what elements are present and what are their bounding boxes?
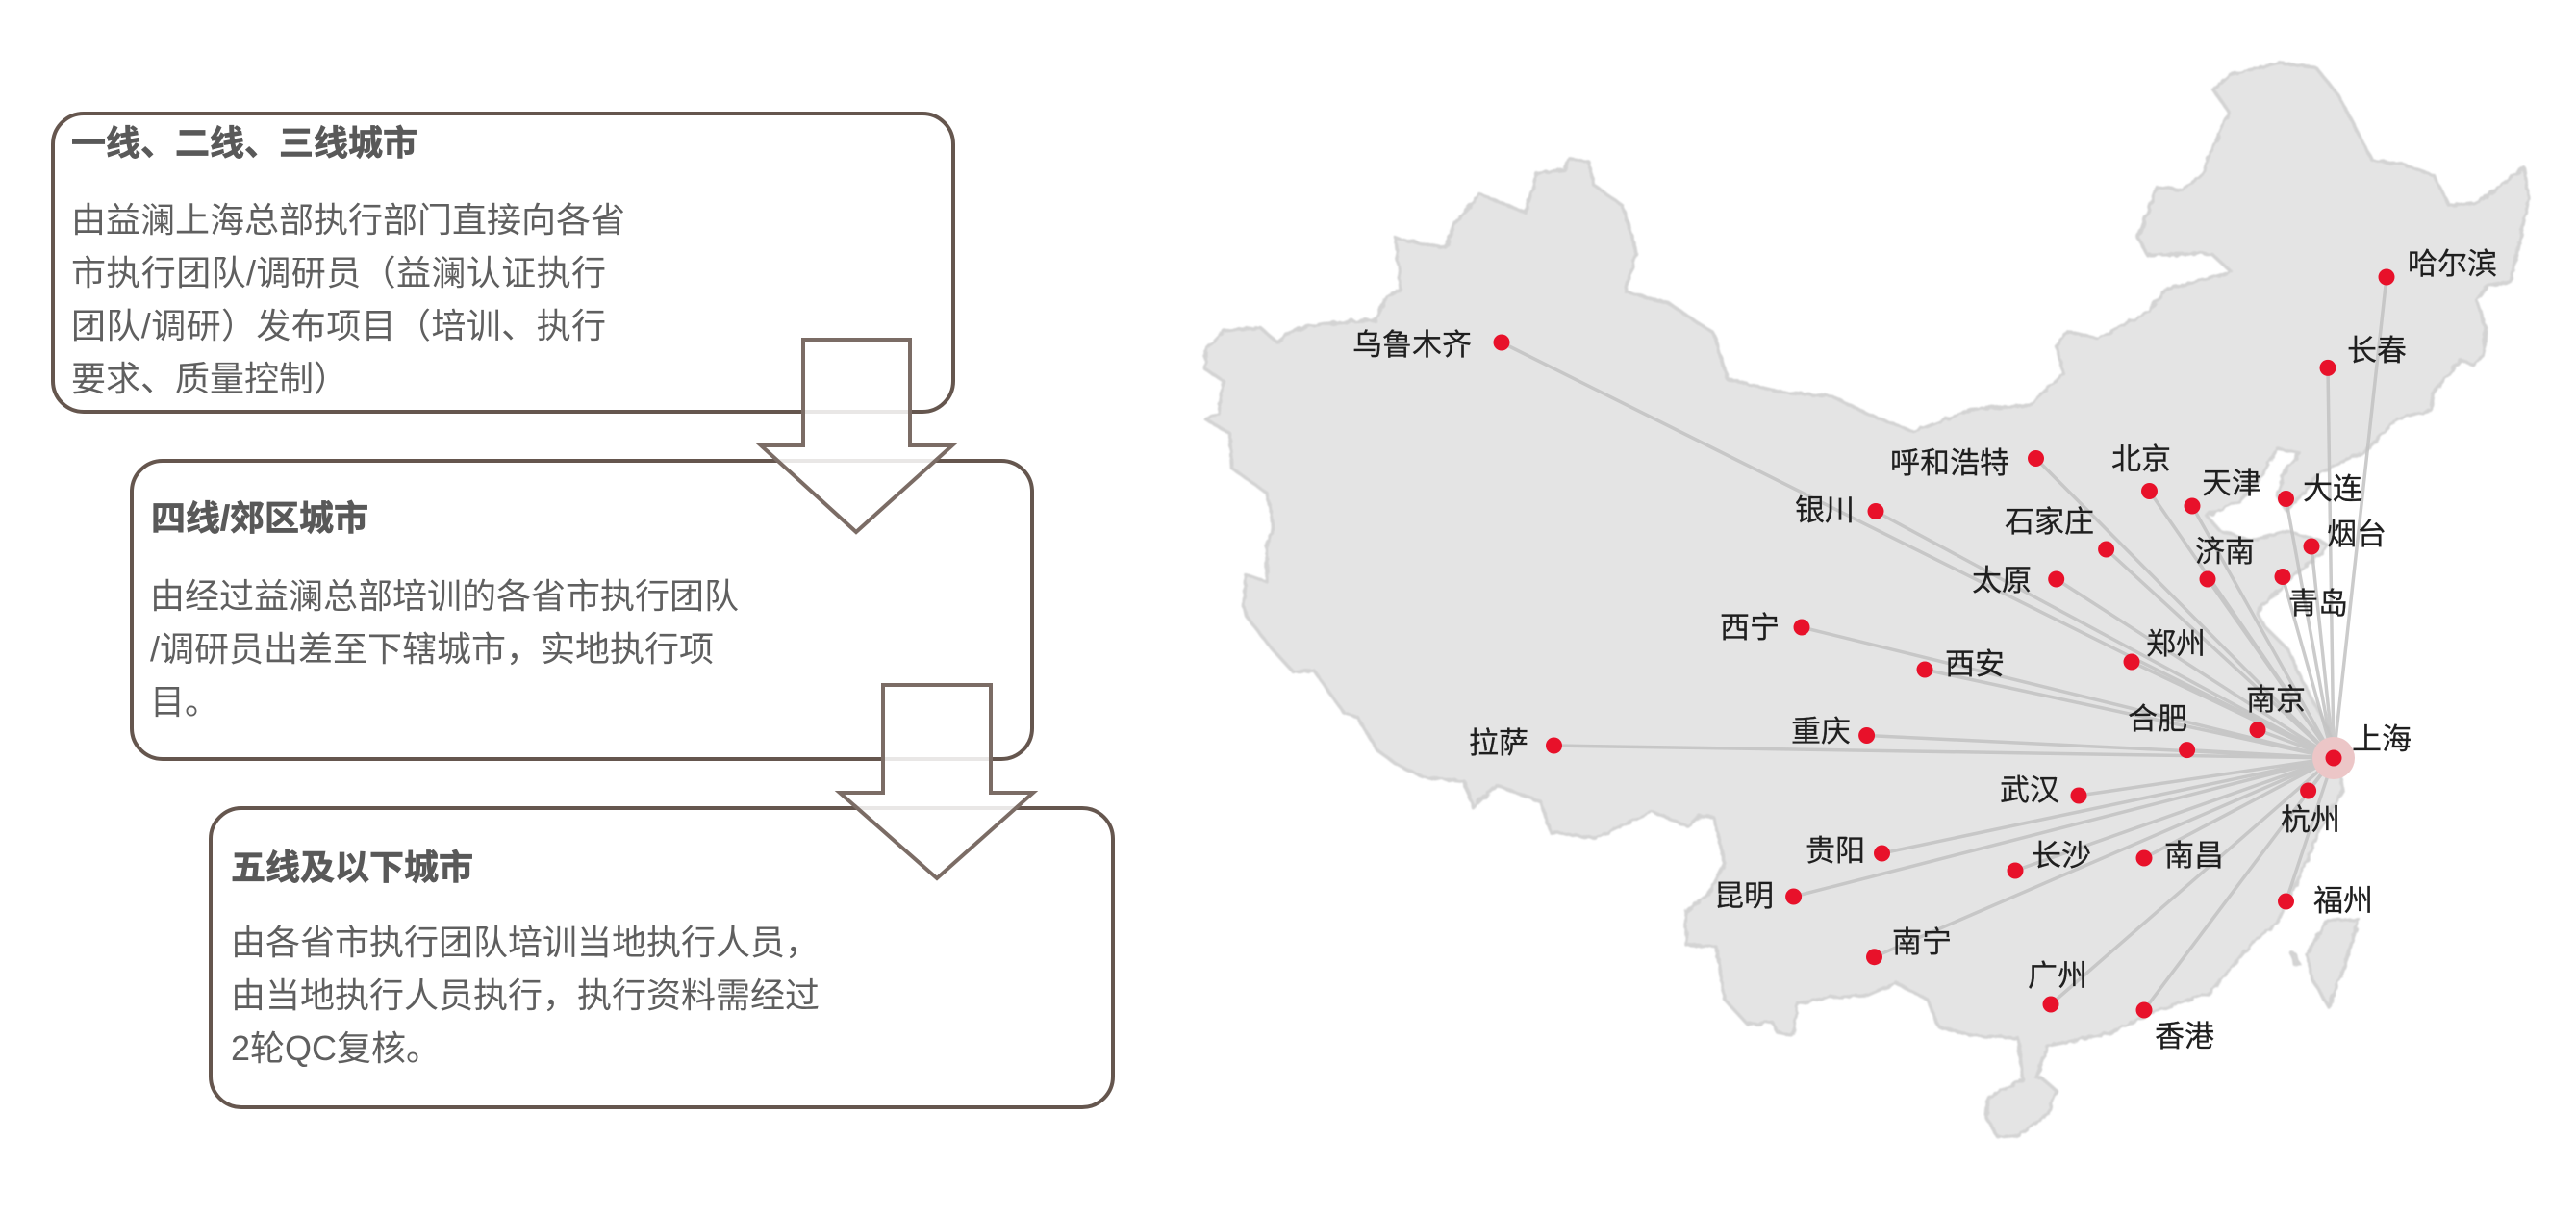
text block: tier 1-3 cities: 要求、质量控制） xyxy=(71,359,348,398)
city labels: 郑州 xyxy=(2146,620,2206,663)
city labels: 长沙 xyxy=(2032,831,2091,874)
text block: tier 1-3 cities: 市执行团队/调研员（益澜认证执行 xyxy=(71,253,606,292)
city labels: 香港 xyxy=(2155,1012,2214,1055)
text block: tier 1-3 cities: 由益澜上海总部执行部门直接向各省 xyxy=(71,200,625,240)
text block: tier 5 and below cities: 由各省市执行团队培训当地执行人员， xyxy=(231,923,820,962)
city labels: 长春 xyxy=(2347,326,2407,369)
city labels: 西宁 xyxy=(1720,603,1780,646)
city labels: 广州 xyxy=(2028,951,2087,995)
city labels: 乌鲁木齐 xyxy=(1352,320,1472,364)
city labels: 大连 xyxy=(2303,465,2362,508)
text block: tier 4 and suburban cities: 目。 xyxy=(150,682,219,722)
city labels: 贵阳 xyxy=(1806,826,1865,870)
city labels: 烟台 xyxy=(2327,510,2387,553)
city labels: 杭州 xyxy=(2281,796,2340,839)
text block: tier 5 and below cities: 由当地执行人员执行，执行资料需经过 xyxy=(231,975,820,1015)
text block: tier 4 and suburban cities: /调研员出差至下辖城市，实地执行项 xyxy=(150,629,714,669)
city labels: 银川 xyxy=(1795,486,1855,529)
text block: tier 5 and below cities: 2轮QC复核。 xyxy=(231,1028,441,1068)
text block: tier 4 and suburban cities: 由经过益澜总部培训的各省市执行团队 xyxy=(150,576,739,616)
arrow: tier 4 to tier 5 xyxy=(840,685,1033,878)
text block: tier 1-3 cities xyxy=(71,200,625,398)
text block: tier 5 and below cities xyxy=(231,923,820,1068)
city labels: 南宁 xyxy=(1892,918,1952,961)
city dots xyxy=(1493,269,2395,1018)
city labels: 青岛 xyxy=(2288,579,2348,622)
city labels: 武汉 xyxy=(2000,766,2059,809)
city labels: 福州 xyxy=(2313,876,2373,920)
panel: tier 1-3 cities xyxy=(53,114,953,412)
city labels xyxy=(1352,240,2497,1055)
heading: tier 4 and suburban cities: 四线/郊区城市 xyxy=(151,498,368,538)
city labels: 西安 xyxy=(1945,640,2005,683)
city labels: 南昌 xyxy=(2164,831,2224,874)
map land xyxy=(1205,63,2529,1137)
text block: tier 1-3 cities: 团队/调研）发布项目（培训、执行 xyxy=(71,306,606,345)
Shanghai halo xyxy=(2312,737,2355,779)
city labels: 济南 xyxy=(2195,527,2255,570)
city labels: 呼和浩特 xyxy=(1890,439,2009,482)
city labels: 拉萨 xyxy=(1469,719,1528,762)
panel: tier 5 and below cities xyxy=(211,808,1113,1107)
arrow: tier 1-3 to tier 4 xyxy=(761,340,952,532)
city labels: 昆明 xyxy=(1714,872,1774,915)
city labels: 石家庄 xyxy=(2005,497,2094,541)
city labels: 重庆 xyxy=(1791,707,1851,750)
city labels: 太原 xyxy=(1972,556,2032,599)
city labels: 合肥 xyxy=(2128,695,2187,738)
text block: tier 4 and suburban cities xyxy=(150,576,739,722)
city labels: 上海 xyxy=(2352,715,2412,758)
city labels: 北京 xyxy=(2111,435,2171,478)
city labels: 哈尔滨 xyxy=(2408,240,2497,283)
connection lines from Shanghai xyxy=(1502,277,2387,1010)
city labels: 天津 xyxy=(2202,459,2261,502)
city labels: 南京 xyxy=(2246,675,2306,719)
panel: tier 4 and suburban cities xyxy=(132,461,1032,759)
heading: tier 5 and below cities: 五线及以下城市 xyxy=(231,848,473,887)
map of China xyxy=(1205,63,2529,1137)
heading: tier 1-3 cities: 一线、二线、三线城市 xyxy=(71,123,417,163)
